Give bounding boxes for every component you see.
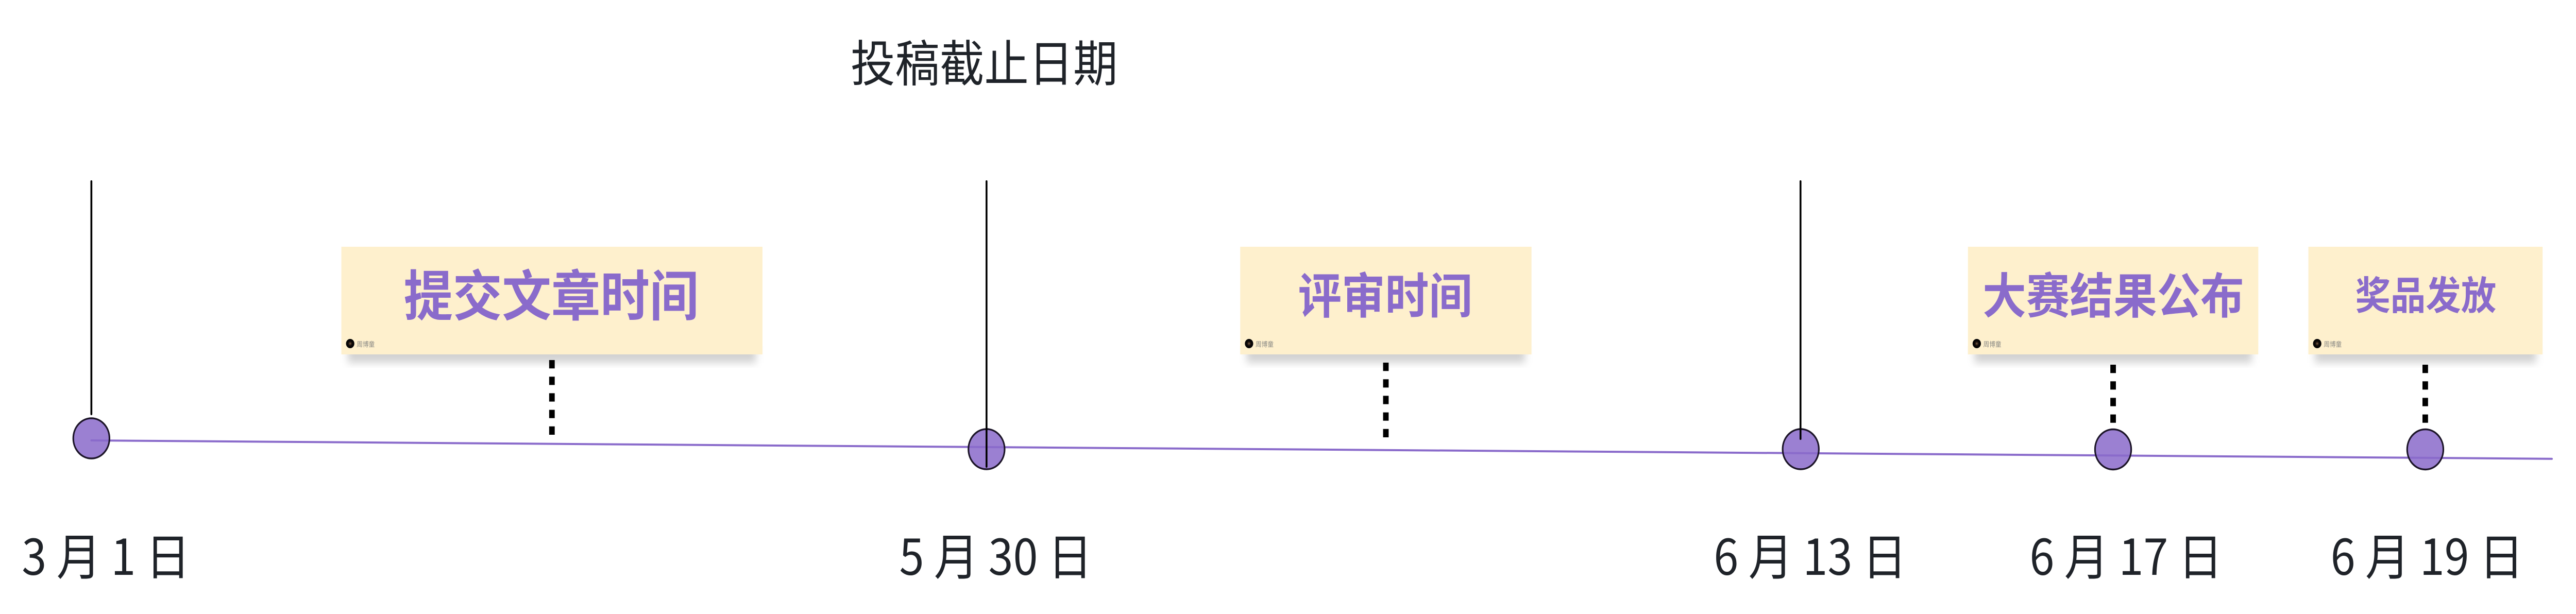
author name: 周博童 (357, 339, 375, 349)
date label: June 17: 6 月 17 日 (2029, 518, 2223, 589)
heading: submission deadline: 投稿截止日期 (851, 25, 1118, 96)
panel: results announcement (1968, 247, 2258, 363)
timeline axis (91, 440, 2552, 459)
panel: submission period (342, 247, 762, 363)
author avatar (2313, 339, 2321, 348)
author avatar (1245, 339, 1253, 348)
connector: review card to axis (1383, 363, 1389, 437)
author name: 周博童 (1983, 339, 2002, 349)
connector: submission card to axis (549, 360, 555, 435)
connector: results card to marker (2110, 365, 2116, 423)
author name: 周博童 (2324, 339, 2342, 349)
milestone marker: June 17 (2095, 430, 2131, 470)
panel: review period (1240, 247, 1532, 363)
author name: 周博童 (1256, 339, 1274, 349)
connector: prize card to marker (2422, 365, 2428, 423)
card title: 大赛结果公布 (1982, 257, 2244, 327)
author avatar (346, 339, 354, 348)
date label: June 13: 6 月 13 日 (1714, 518, 1907, 589)
milestone marker: May 30 (969, 181, 1005, 469)
milestone marker: June 13 (1783, 181, 1819, 469)
date label: May 30: 5 月 30 日 (899, 518, 1092, 589)
date label: March 1: 3 月 1 日 (22, 518, 190, 589)
panel: prize distribution (2309, 247, 2543, 363)
date label: June 19: 6 月 19 日 (2331, 518, 2523, 589)
author avatar (1973, 339, 1981, 348)
milestone marker: June 19 (2407, 430, 2444, 470)
card title: 评审时间 (1298, 257, 1472, 327)
milestone marker: March 1 (73, 181, 109, 458)
card title: 奖品发放 (2355, 264, 2496, 321)
card title: 提交文章时间 (404, 253, 699, 332)
